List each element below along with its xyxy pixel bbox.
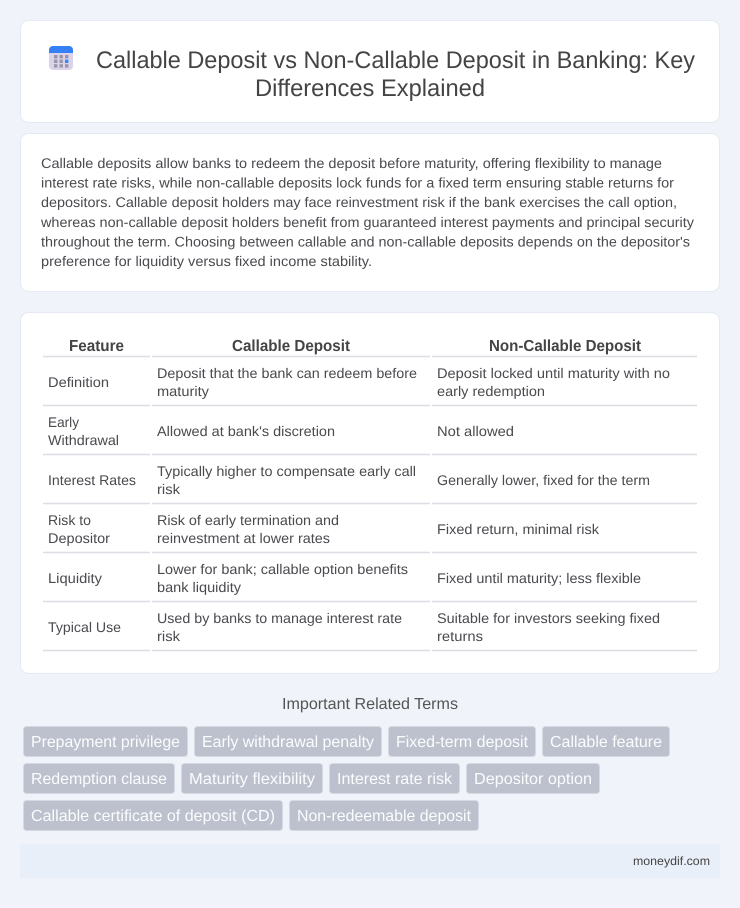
row: interest rates: Generally lower, fixed for the term xyxy=(437,472,650,488)
tag: fixed-term deposit: Fixed-term deposit xyxy=(396,734,529,751)
row: interest rates: risk xyxy=(157,481,181,497)
title: Differences Explained xyxy=(255,75,485,102)
panel: title header xyxy=(20,20,720,122)
title xyxy=(96,47,695,102)
tag: prepayment privilege xyxy=(24,726,188,756)
table header: Callable Deposit xyxy=(232,338,351,355)
panel: summary paragraph xyxy=(20,134,720,292)
row: risk to depositor: Depositor xyxy=(48,530,110,546)
heading: important related terms: Important Related Terms xyxy=(282,696,458,713)
tag: callable certificate of deposit xyxy=(24,800,282,830)
row: liquidity: Liquidity xyxy=(48,570,102,586)
row: risk to depositor: Risk to xyxy=(48,512,91,528)
panel: comparison table xyxy=(20,312,720,674)
text block: summary: Callable deposits allow banks to redeem the deposit before maturity, offering flexibility to manage xyxy=(41,155,662,171)
tag: callable feature: Callable feature xyxy=(550,734,662,751)
panel: related term tags xyxy=(24,726,670,830)
tag: depositor option: Depositor option xyxy=(474,771,592,788)
text block: summary: preference for liquidity versus fixed income stability. xyxy=(41,253,372,269)
tag: early withdrawal penalty: Early withdrawal penalty xyxy=(202,734,374,751)
row: early withdrawal: Early xyxy=(48,414,79,430)
tag: redemption clause xyxy=(24,764,174,794)
icon: calendar xyxy=(49,46,73,70)
tag: interest rate risk: Interest rate risk xyxy=(337,771,453,788)
row: interest rates xyxy=(43,463,697,504)
tag: interest rate risk xyxy=(330,764,460,794)
title: Callable Deposit vs Non-Callable Deposit in Banking: Key xyxy=(96,47,695,74)
text block: summary: depositors. Callable deposit holders may face reinvestment risk if the bank exercises the call option, xyxy=(41,194,677,210)
row: early withdrawal xyxy=(43,414,697,454)
row: definition: Deposit that the bank can redeem before xyxy=(157,365,417,381)
row: risk to depositor: reinvestment at lower rates xyxy=(157,530,330,546)
row: typical use: Suitable for investors seeking fixed xyxy=(437,610,660,626)
tag: redemption clause: Redemption clause xyxy=(31,771,167,788)
row: interest rates: Interest Rates xyxy=(48,472,136,488)
row: definition: Deposit locked until maturity with no xyxy=(437,365,670,381)
row: risk to depositor: Risk of early termination and xyxy=(157,512,339,528)
footer bar: moneydif.com xyxy=(633,854,710,868)
table header xyxy=(43,338,697,356)
tag: maturity flexibility xyxy=(182,764,322,794)
tag: maturity flexibility: Maturity flexibility xyxy=(189,771,315,788)
row: risk to depositor xyxy=(43,512,697,552)
row: liquidity: Lower for bank; callable option benefits xyxy=(157,561,408,577)
row: definition xyxy=(43,365,697,406)
row: liquidity: bank liquidity xyxy=(157,579,241,595)
table header: Non-Callable Deposit xyxy=(489,338,642,355)
footer bar xyxy=(20,844,720,878)
text block: summary: whereas non-callable deposit holders benefit from guaranteed interest payments and principal security xyxy=(40,214,694,230)
row: early withdrawal: Withdrawal xyxy=(48,432,119,448)
row: early withdrawal: Not allowed xyxy=(437,423,514,439)
row: liquidity xyxy=(43,561,697,602)
table header: Feature xyxy=(69,338,124,355)
row: interest rates: Typically higher to compensate early call xyxy=(157,463,416,479)
tag: non-redeemable deposit: Non-redeemable deposit xyxy=(297,808,472,825)
tag: non-redeemable deposit xyxy=(290,800,478,830)
row: risk to depositor: Fixed return, minimal risk xyxy=(437,521,600,537)
tag: callable certificate of deposit: Callable certificate of deposit (CD) xyxy=(31,808,275,825)
tag: early withdrawal penalty xyxy=(194,726,382,756)
row: liquidity: Fixed until maturity; less flexible xyxy=(437,570,641,586)
tag: depositor option xyxy=(466,764,600,794)
text block: summary: throughout the term. Choosing between callable and non-callable deposits depends on the depositor's xyxy=(41,233,690,249)
row: early withdrawal: Allowed at bank's discretion xyxy=(157,423,335,439)
tag: callable feature xyxy=(542,726,670,756)
row: typical use: risk xyxy=(157,628,181,644)
row: typical use xyxy=(43,610,697,650)
row: definition: Definition xyxy=(48,374,109,390)
row: definition: early redemption xyxy=(437,383,545,399)
row: definition: maturity xyxy=(157,383,209,399)
row: typical use: Used by banks to manage interest rate xyxy=(157,610,402,626)
row: typical use: returns xyxy=(437,628,483,644)
row: typical use: Typical Use xyxy=(48,619,121,635)
tag: fixed-term deposit xyxy=(388,726,536,756)
text block: summary: interest rate risks, while non-callable deposits lock funds for a fixed term ensuring stable returns for xyxy=(41,175,674,191)
text block: summary xyxy=(40,155,694,269)
tag: prepayment privilege: Prepayment privilege xyxy=(31,734,180,751)
